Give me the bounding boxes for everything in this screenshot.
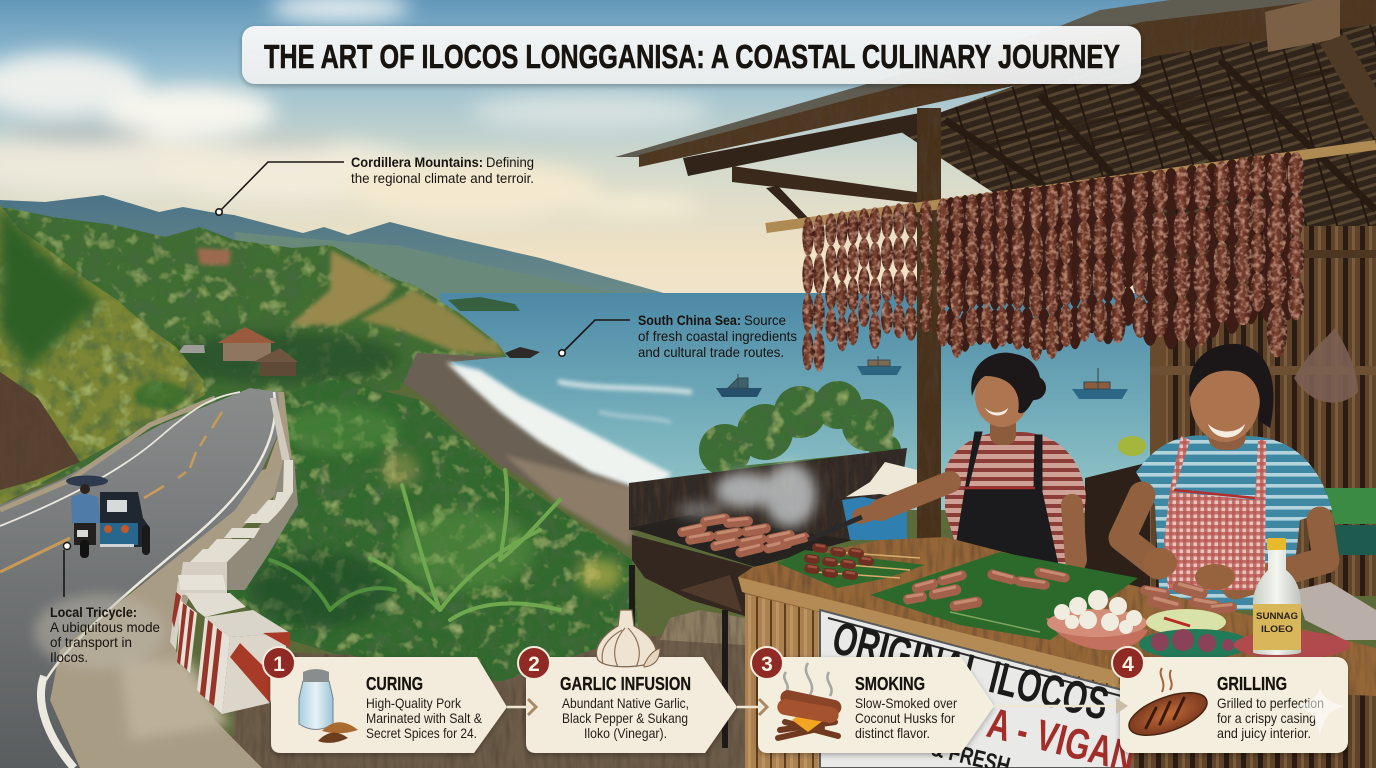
- step 3 card: smoking: [758, 657, 994, 753]
- arrow: step 1 to 2: [507, 699, 536, 715]
- smoke: [676, 463, 816, 527]
- icon: salt shaker and spices: [299, 669, 358, 743]
- dirt ground: [230, 610, 750, 768]
- left hillside: [0, 205, 205, 505]
- title text: THE ART OF ILOCOS LONGGANISA: A COASTAL CULINARY JOURNEY: [264, 38, 1120, 75]
- text: garlic infusion: Iloko (Vinegar).: [584, 725, 667, 741]
- hanging sausages back layer: [945, 152, 1295, 352]
- tricycle: [66, 476, 150, 558]
- grill body: [632, 535, 753, 616]
- beach and waves: [403, 347, 690, 547]
- railing fence: [1085, 462, 1150, 590]
- heading: curing: CURING: [366, 674, 423, 694]
- mountains: [0, 195, 678, 305]
- step 1 card: curing: [271, 657, 507, 753]
- text: grilling: for a crispy casing: [1217, 710, 1316, 726]
- bamboo drying pole: [766, 145, 1376, 228]
- badge 3: 3: [761, 653, 773, 676]
- foreground foliage: [222, 378, 640, 682]
- text: garlic infusion: Abundant Native Garlic,: [562, 695, 689, 711]
- icon: garlic: [596, 610, 660, 667]
- badge 2: [518, 647, 550, 679]
- arrow: step 3 to 4: [994, 698, 1128, 714]
- corrugated roof edge: [615, 0, 1376, 157]
- market hut structure: [615, 0, 1376, 596]
- arms left: [860, 482, 1076, 560]
- road barriers: [170, 398, 298, 714]
- text: smoking: Slow-Smoked over: [855, 695, 957, 711]
- callout: Local Tricycle: Local Tricycle:: [50, 604, 137, 620]
- garlic basket: [1046, 590, 1148, 650]
- text: curing: High-Quality Pork: [366, 695, 462, 711]
- text: grilling: [1217, 695, 1324, 741]
- vendor left: [808, 353, 1086, 575]
- neck and head left: [990, 415, 1016, 445]
- badge 1: [263, 647, 295, 679]
- arms right: [1122, 495, 1326, 586]
- badge 4: 4: [1122, 653, 1134, 676]
- badge 4: [1112, 647, 1144, 679]
- step 2 card: garlic infusion: [526, 610, 737, 753]
- badge 1: 1: [273, 653, 285, 676]
- red basket: [1234, 631, 1350, 659]
- vinegar bottle: [1253, 538, 1301, 655]
- hands right: [1143, 548, 1177, 578]
- text: smoking: Coconut Husks for: [855, 710, 955, 726]
- callout: South China Sea: of fresh coastal ingredients: [638, 328, 797, 344]
- banana fronds: [270, 470, 560, 620]
- cloth and blue bag: [842, 462, 917, 540]
- heading: grilling: GRILLING: [1217, 674, 1287, 694]
- banana leaf skewers: [777, 542, 925, 588]
- rafters: [945, 60, 1376, 210]
- text: curing: Secret Spices for 24.: [366, 725, 477, 741]
- apron black: [953, 432, 1058, 565]
- sparkle: [1296, 688, 1344, 736]
- vendor right: [1122, 344, 1332, 610]
- sausages on grill: [676, 512, 811, 558]
- heading: garlic infusion: GARLIC INFUSION: [560, 674, 691, 694]
- callout: Cordillera Mountains: Cordillera Mountains:: [351, 154, 483, 170]
- road shoulder: [50, 392, 292, 768]
- roof beams: [639, 0, 1376, 222]
- sky: [0, 0, 1376, 300]
- text: garlic infusion: [562, 695, 689, 741]
- callout: Cordillera Mountains: [216, 154, 534, 215]
- mid hills: [0, 208, 507, 500]
- text: grilling: Grilled to perfection: [1217, 695, 1324, 711]
- village houses: [178, 327, 298, 376]
- small shrub by fence: [1118, 436, 1146, 456]
- callout: Local Tricycle: Ilocos.: [50, 649, 88, 665]
- market table: [738, 537, 1376, 768]
- icon: smoking sausages over fire: [776, 663, 843, 738]
- clouds: [0, 0, 710, 220]
- callout: Cordillera Mountains: Defining: [486, 154, 534, 170]
- text: curing: [366, 695, 483, 741]
- grill legs: [632, 565, 725, 748]
- neck and head right: [1208, 420, 1246, 450]
- shirt right: [1136, 435, 1332, 610]
- tree behind grill: [699, 381, 901, 476]
- text: grilling: and juicy interior.: [1217, 725, 1311, 741]
- sausages by vendor: [1139, 580, 1237, 614]
- plastic bag: [1296, 582, 1376, 640]
- heading: smoking: SMOKING: [855, 674, 925, 694]
- badge 3: [751, 647, 783, 679]
- road: [0, 388, 280, 768]
- banana leaf sausages: [870, 552, 1138, 640]
- grill lid: [629, 448, 907, 540]
- vinegar bottle: SUNNAG: [1256, 611, 1298, 621]
- icon: grilled sausage: [1124, 668, 1212, 744]
- text: smoking: [855, 695, 957, 741]
- badge 2: 2: [528, 653, 540, 676]
- table top: [738, 537, 1376, 696]
- callout: South China Sea: Source: [744, 312, 786, 328]
- callout: South China Sea: South China Sea:: [638, 312, 741, 328]
- tongs: [808, 517, 862, 540]
- text: garlic infusion: Black Pepper & Sukang: [562, 710, 688, 726]
- title banner: [242, 26, 1141, 84]
- distant boats: [716, 356, 1128, 399]
- apron gingham: [1164, 436, 1266, 590]
- sea: [440, 293, 1160, 510]
- text: curing: Marinated with Salt &: [366, 710, 483, 726]
- salad plate: [1146, 609, 1226, 635]
- shirt left: [945, 432, 1086, 575]
- callout: Local Tricycle: of transport in: [50, 634, 132, 650]
- step 4 card: grilling: [1120, 657, 1348, 753]
- table front: [745, 590, 1122, 768]
- hanging sausages: [802, 152, 1304, 372]
- callout: South China Sea: and cultural trade routes.: [638, 344, 784, 360]
- vinegar bottle: ILOEO: [1261, 624, 1293, 634]
- callout: Local Tricycle: A ubiquitous mode: [50, 619, 160, 635]
- grill grate: [629, 515, 853, 567]
- charcoal grill: [629, 448, 907, 748]
- vendor sign banner: ORIGINAL ILOCOS: [828, 611, 1114, 730]
- callout: Cordillera Mountains: the regional climate and terroir.: [351, 170, 534, 186]
- text: smoking: distinct flavor.: [855, 725, 930, 741]
- callout: Local Tricycle: [34, 542, 166, 670]
- onion bowl: [1139, 629, 1251, 659]
- callout: South China Sea: [559, 312, 797, 360]
- bamboo wall: [1150, 226, 1376, 596]
- arrow: step 2 to 3: [737, 699, 767, 715]
- support post: [917, 108, 941, 542]
- land base: [0, 290, 1376, 768]
- roof underside: [898, 0, 1376, 240]
